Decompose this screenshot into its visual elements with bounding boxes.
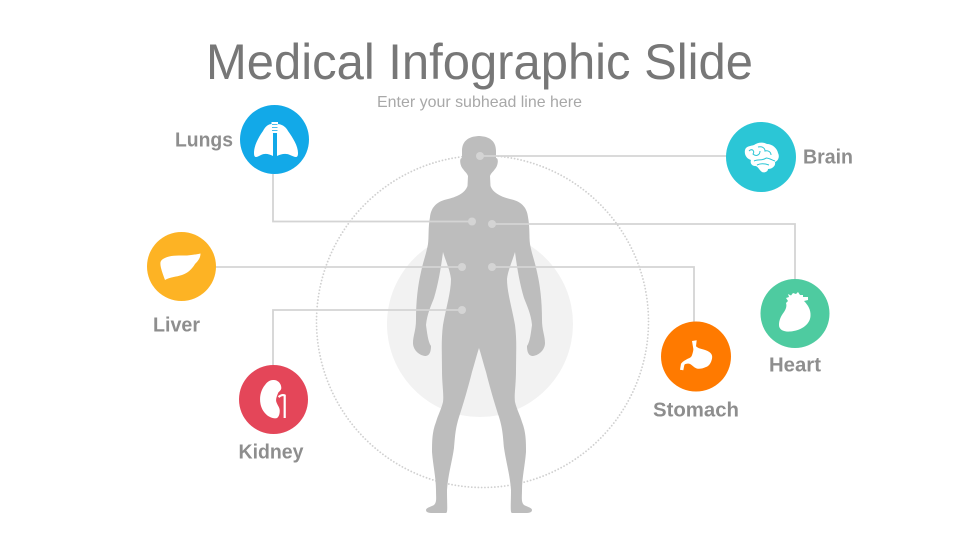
label: kidney: Kidney — [238, 442, 304, 464]
connector: stomach — [488, 263, 694, 323]
background disc — [387, 231, 573, 417]
label: liver: Liver — [153, 314, 200, 336]
human body silhouette — [413, 136, 545, 513]
icon: brain — [726, 122, 796, 192]
icon: stomach — [661, 322, 731, 392]
icon: heart — [760, 279, 830, 348]
connector: liver — [215, 263, 466, 271]
title: Medical Infographic Slide — [206, 34, 753, 90]
label: lungs: Lungs — [175, 130, 233, 152]
icon: lungs — [240, 105, 309, 174]
label: heart: Heart — [769, 354, 821, 376]
connector: brain — [476, 152, 727, 160]
label: brain: Brain — [803, 146, 853, 168]
connector: heart — [488, 220, 795, 280]
subhead: Enter your subhead line here — [377, 94, 582, 111]
connector: kidney — [273, 306, 466, 366]
label: stomach: Stomach — [653, 400, 739, 422]
dotted ring — [316, 156, 648, 488]
connector: lungs — [273, 174, 476, 226]
icon: kidney — [239, 365, 308, 434]
icon: liver — [147, 232, 216, 301]
